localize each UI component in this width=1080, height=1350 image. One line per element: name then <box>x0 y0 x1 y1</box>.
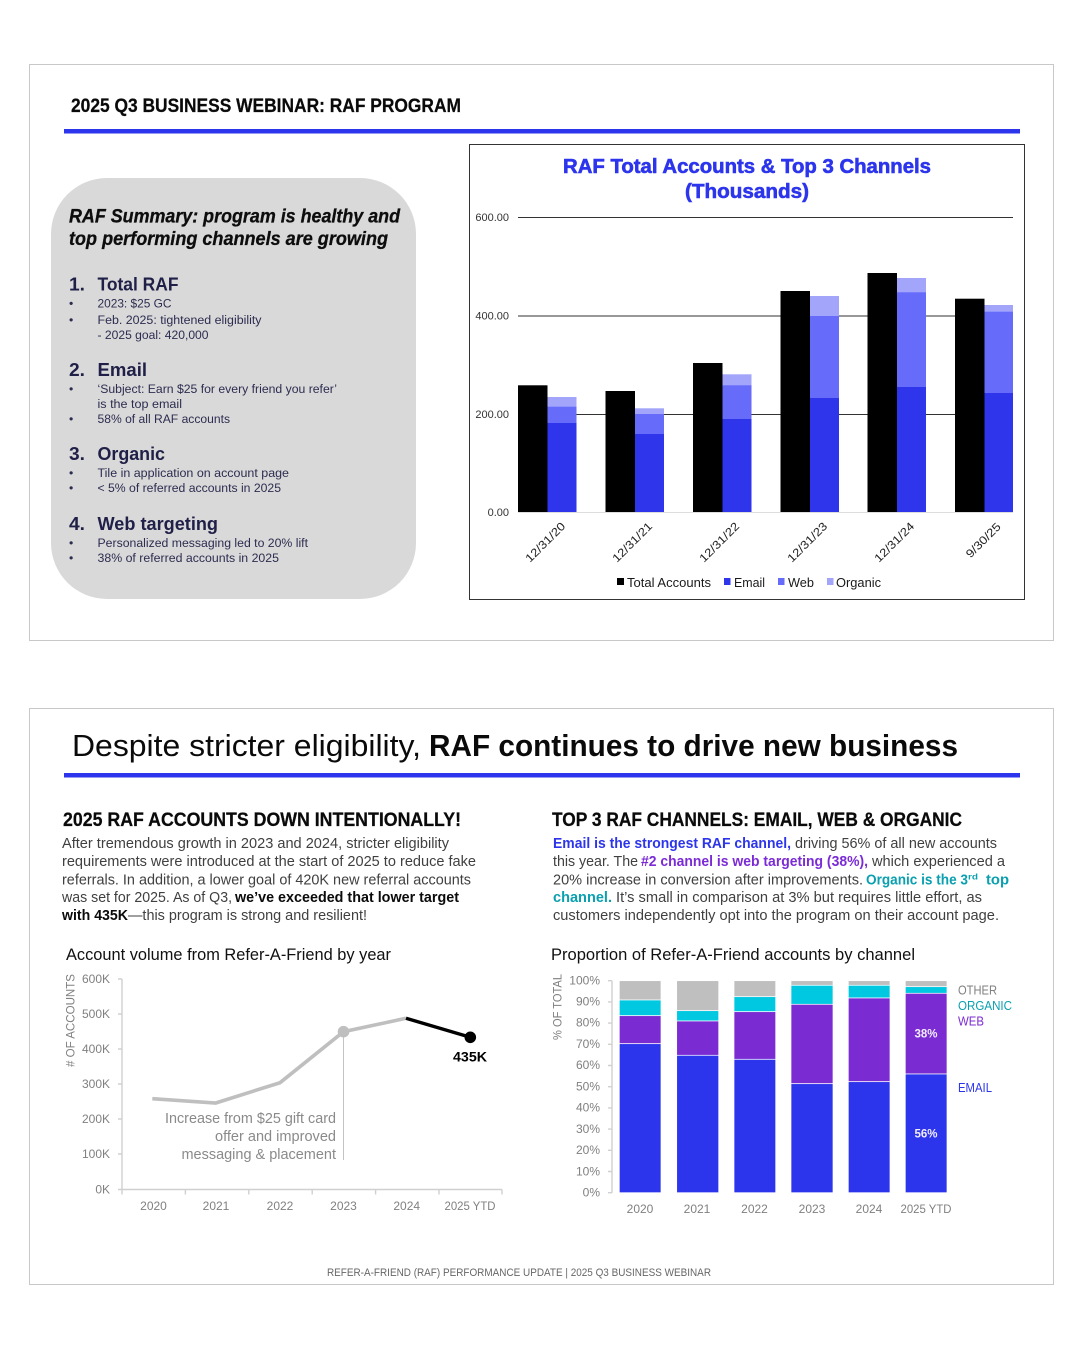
axes and tick labels: 2023 <box>330 1199 357 1213</box>
summary item: Email: • <box>69 382 73 396</box>
annotation text: Increase from $25 gift card <box>165 1111 336 1127</box>
panel: RAF program slide <box>30 64 1054 640</box>
axes and tick labels: 100K <box>82 1147 110 1161</box>
chart legend: Web <box>788 575 814 590</box>
summary item: Email: 58% of all RAF accounts <box>98 412 230 426</box>
text block: top 3 channels: 20% increase in conversion after improvements. <box>553 872 863 888</box>
y axis title: # OF ACCOUNTS <box>64 974 78 1067</box>
summary item: Organic: • <box>69 481 73 495</box>
marker 2025 <box>464 1032 476 1043</box>
axes and tick labels: 200K <box>82 1112 110 1126</box>
y axis and labels: 60% <box>576 1058 600 1072</box>
axes and tick labels: 300K <box>82 1077 110 1091</box>
summary item: Total RAF: - 2025 goal: 420,000 <box>98 328 209 342</box>
y axis gridlines and labels: 600.00 <box>475 212 509 224</box>
summary heading: top performing channels are growing <box>69 229 388 250</box>
text block: accounts down intentionally: was set for 2025. As of Q3, <box>61 890 232 906</box>
summary item: Total RAF: Feb. 2025: tightened eligibility <box>98 313 262 327</box>
summary item: Total RAF <box>69 274 262 342</box>
axes and tick labels: 500K <box>82 1007 110 1021</box>
series labels: OTHER <box>958 984 997 998</box>
summary item: Web targeting: 38% of referred accounts in 2025 <box>98 551 279 565</box>
stacked chart title: Proportion of Refer-A-Friend accounts by channel <box>551 946 915 964</box>
text block: accounts down intentionally: we’ve exceeded that lower target <box>234 890 459 906</box>
text block: accounts down intentionally: —this program is strong and resilient! <box>128 908 367 924</box>
y axis and labels <box>569 974 612 1200</box>
summary item: Email: • <box>69 412 73 426</box>
chart legend: Email <box>734 575 765 590</box>
x axis date labels: 9/30/25 <box>964 521 1004 561</box>
summary item: Organic: Organic <box>98 443 165 464</box>
chart legend <box>617 575 881 590</box>
x axis date labels: 12/31/23 <box>786 521 830 565</box>
x axis date labels: 12/31/22 <box>698 521 742 565</box>
summary item: Organic: • <box>69 466 73 480</box>
axes and tick labels: 600K <box>82 972 110 986</box>
axes and tick labels: 2021 <box>203 1199 230 1213</box>
bars: 12/31/21 <box>606 391 664 512</box>
y axis gridlines and labels <box>475 212 1013 519</box>
chart: account volume line chart <box>64 946 502 1213</box>
summary item: Web targeting: Web targeting <box>98 513 218 534</box>
x axis labels: 2021 <box>684 1202 711 1216</box>
annotation text: messaging & placement <box>182 1147 336 1163</box>
summary item: Organic: < 5% of referred accounts in 2025 <box>98 481 281 495</box>
summary item: Email: Email <box>98 359 147 380</box>
summary item: Web targeting <box>69 513 309 565</box>
series labels: WEB <box>958 1014 984 1028</box>
stack 2022 <box>734 981 776 1193</box>
marker 2023 <box>338 1026 349 1037</box>
series labels: ORGANIC <box>958 999 1012 1013</box>
callout line <box>342 1032 344 1160</box>
footer: REFER-A-FRIEND (RAF) PERFORMANCE UPDATE | 2025 Q3 BUSINESS WEBINAR <box>327 1267 711 1279</box>
summary item: Total RAF: 1. <box>69 274 85 294</box>
text block: top 3 channels: It’s small in comparison at 3% but requires little effort, as <box>616 890 982 906</box>
summary heading: RAF Summary: program is healthy and <box>69 206 400 228</box>
x axis date labels: 12/31/20 <box>524 521 568 565</box>
axes and tick labels: 2025 YTD <box>444 1199 496 1213</box>
axes and tick labels: 0K <box>95 1182 110 1196</box>
text block: top 3 channels: this year. The <box>553 854 638 870</box>
panel: performance update slide <box>30 708 1054 1284</box>
bar value labels: 38% <box>914 1029 938 1041</box>
headline rule <box>64 773 1020 778</box>
x axis labels <box>627 1202 952 1216</box>
series labels: EMAIL <box>958 1081 992 1095</box>
chart: channel proportion stacked bars <box>550 946 1012 1216</box>
x axis date labels <box>524 520 1004 565</box>
y axis and labels: 10% <box>576 1164 600 1178</box>
bar value labels <box>914 1029 938 1141</box>
bars: 12/31/24 <box>868 273 926 512</box>
text block: accounts down intentionally: After tremendous growth in 2023 and 2024, stricter eligibility <box>62 836 450 852</box>
summary item: Email: 2. <box>69 359 85 380</box>
summary item: Web targeting: • <box>69 536 73 550</box>
heading: slide headline: Despite stricter eligibility, <box>72 728 421 763</box>
bar value labels: 56% <box>914 1129 938 1141</box>
y axis title: % OF TOTAL <box>550 974 564 1040</box>
axes and tick labels: 400K <box>82 1042 110 1056</box>
y axis and labels: 20% <box>576 1143 600 1157</box>
chart legend: Organic <box>836 575 881 590</box>
summary item: Email <box>69 359 337 426</box>
summary item: Organic <box>69 443 289 495</box>
text block: top 3 channels: Organic is the 3 <box>866 872 968 888</box>
y axis gridlines and labels: 0.00 <box>488 507 509 519</box>
x axis labels: 2024 <box>856 1202 883 1216</box>
summary item: Email: ‘Subject: Earn $25 for every friend you refer’ <box>98 382 337 396</box>
text block: top 3 channels: driving 56% of all new accounts <box>795 836 997 852</box>
annotation text <box>165 1111 336 1163</box>
summary heading <box>69 206 400 250</box>
axes and tick labels <box>82 972 502 1213</box>
series labels <box>958 984 1012 1095</box>
black 2025 segment <box>406 1018 470 1037</box>
summary item: Web targeting: 4. <box>69 513 85 534</box>
text block: top 3 channels: channel. <box>553 890 612 906</box>
summary item: Total RAF: • <box>69 296 73 310</box>
summary item: Total RAF: 2023: $25 GC <box>98 296 172 310</box>
y axis and labels: 100% <box>569 974 600 988</box>
chart title: RAF Total Accounts & Top 3 Channels <box>563 156 931 178</box>
value label 435K: 435K <box>453 1048 487 1064</box>
text block: top 3 channels: customers independently opt into the program on their account page. <box>553 908 999 924</box>
heading: slide headline: RAF continues to drive new business <box>429 728 958 763</box>
heading rule <box>64 129 1020 134</box>
bars: 12/31/23 <box>780 291 839 512</box>
stack 2021 <box>677 981 719 1193</box>
text block: accounts down intentionally: referrals. In addition, a lower goal of 420K new referral accounts <box>62 872 471 888</box>
heading: slide headline <box>72 728 958 763</box>
summary item: Organic: 3. <box>69 443 85 464</box>
heading: slide title: 2025 Q3 BUSINESS WEBINAR: RAF PROGRAM <box>71 96 461 117</box>
x axis labels: 2023 <box>799 1202 826 1216</box>
y axis and labels: 0% <box>583 1186 600 1200</box>
stack 2024 <box>848 981 890 1193</box>
text block: top 3 channels: #2 channel is web targeting (38%), <box>641 854 868 870</box>
y axis and labels: 50% <box>576 1080 600 1094</box>
y axis and labels: 30% <box>576 1122 600 1136</box>
stack 2020 <box>619 981 661 1193</box>
text block: top 3 channels: Email is the strongest RAF channel, <box>553 836 791 852</box>
axes and tick labels: 2022 <box>267 1199 294 1213</box>
bars: 9/30/25 <box>955 299 1013 512</box>
text block: top 3 channels: TOP 3 RAF CHANNELS: EMAIL, WEB & ORGANIC <box>552 810 962 831</box>
axes and tick labels: 2020 <box>140 1199 167 1213</box>
text block: top 3 channels: top <box>986 872 1009 888</box>
summary item: Total RAF: Total RAF <box>98 274 178 294</box>
chart legend: Total Accounts <box>627 575 712 590</box>
text block: top 3 channels <box>552 810 1009 924</box>
text block: accounts down intentionally: with 435K <box>61 908 129 924</box>
annotation text: offer and improved <box>215 1129 336 1145</box>
x axis labels: 2020 <box>627 1202 654 1216</box>
text block: accounts down intentionally: 2025 RAF ACCOUNTS DOWN INTENTIONALLY! <box>63 810 461 831</box>
text block: accounts down intentionally: requirements were introduced at the start of 2025 to reduce fake <box>62 854 476 870</box>
y axis and labels: 90% <box>576 994 600 1008</box>
summary item: Email: is the top email <box>98 397 182 411</box>
axes and tick labels: 2024 <box>393 1199 420 1213</box>
summary item: Organic: Tile in application on account page <box>98 466 289 480</box>
chart title: (Thousands) <box>685 181 809 203</box>
chart title <box>563 156 931 203</box>
y axis and labels: 80% <box>576 1016 600 1030</box>
bars: 12/31/22 <box>693 363 752 512</box>
x axis date labels: 12/31/24 <box>873 520 918 565</box>
panel: RAF summary <box>51 178 416 599</box>
stack 2023 <box>791 981 833 1193</box>
bars: 12/31/20 <box>518 385 576 512</box>
text block: top 3 channels: which experienced a <box>871 854 1005 870</box>
summary item: Web targeting: • <box>69 551 73 565</box>
y axis and labels: 40% <box>576 1101 600 1115</box>
summary item: Total RAF: • <box>69 313 73 327</box>
y axis gridlines and labels: 200.00 <box>475 409 509 421</box>
x axis date labels: 12/31/21 <box>611 521 655 565</box>
gray trend line <box>152 1018 406 1103</box>
line chart title: Account volume from Refer-A-Friend by year <box>66 946 391 964</box>
chart: RAF total accounts and top 3 channels <box>470 144 1024 600</box>
stack 2025 YTD <box>905 981 947 1193</box>
text block: accounts down intentionally <box>61 810 476 924</box>
summary item: Web targeting: Personalized messaging led to 20% lift <box>98 536 309 550</box>
x axis labels: 2025 YTD <box>900 1202 952 1216</box>
text block: top 3 channels: rd <box>968 872 978 882</box>
x axis labels: 2022 <box>741 1202 768 1216</box>
y axis and labels: 70% <box>576 1037 600 1051</box>
y axis gridlines and labels: 400.00 <box>475 310 509 322</box>
